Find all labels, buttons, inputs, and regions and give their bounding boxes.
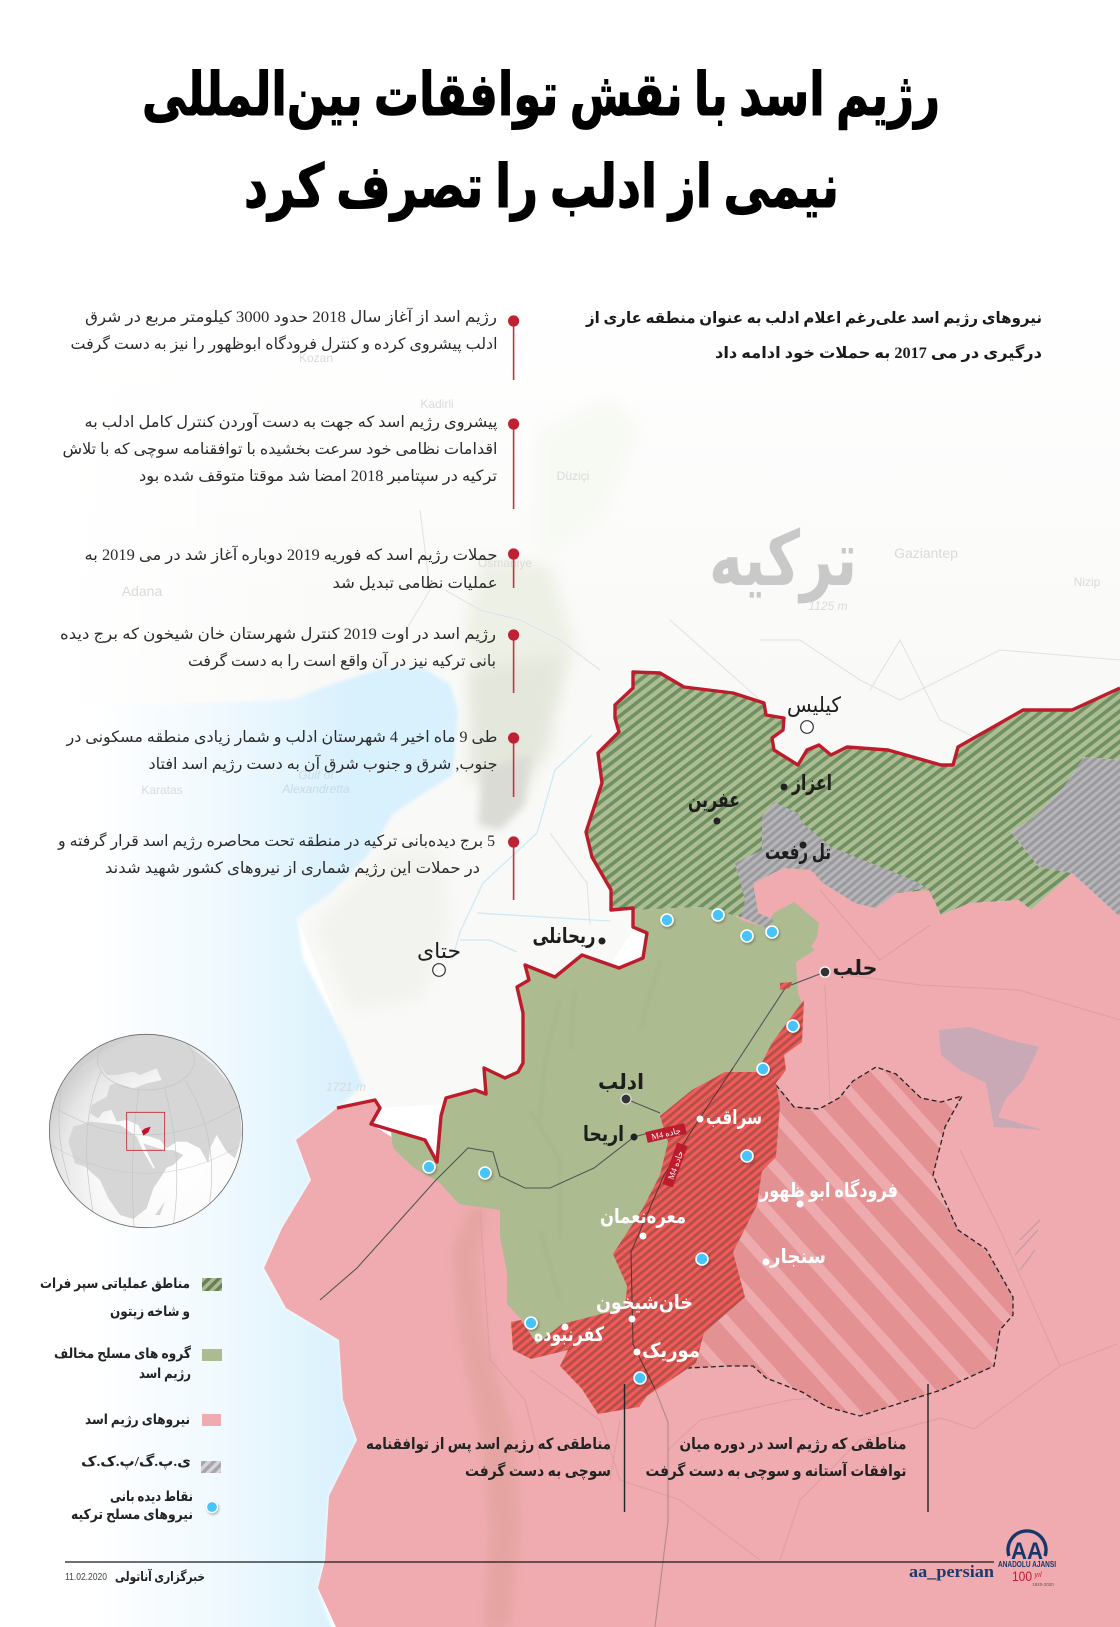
map region: armed opposition groups: [371, 902, 819, 1344]
Turkey border: [337, 672, 1120, 1162]
city labels: حتای: [417, 939, 461, 963]
callout: areas taken between Astana and Sochi: [646, 1384, 928, 1512]
faint base map labels: Gulf of: [298, 768, 335, 782]
faint base map labels: Düziçi: [557, 469, 589, 483]
timeline item 1: [70, 307, 519, 380]
city labels: معره‌نعمان: [600, 1206, 686, 1228]
timeline item 2: ترکیه در سپتامبر 2018 امضا شد موقتا متوقف شده بود: [139, 468, 497, 486]
timeline item 2: پیشروی رژیم اسد که جهت به دست آوردن کنترل کامل ادلب به: [84, 412, 498, 432]
callout: areas taken after Sochi: مناطقی که رژیم اسد پس از توافقنامه: [366, 1436, 611, 1454]
intro text: درگیری در می 2017 به حملات خود ادامه داد: [715, 343, 1042, 362]
road tag: M4 horizontal: [645, 1123, 687, 1143]
city labels: خان‌شیخون: [596, 1292, 693, 1314]
logo: Anadolu Agency: ANADOLU AJANSI: [998, 1559, 1056, 1569]
timeline item 2: اقدامات نظامی خود سرعت بخشیده با توافقنامه سوچی که با تلاش: [62, 441, 497, 458]
logo: Anadolu Agency: AA: [1011, 1538, 1043, 1565]
legend: observation points: نیروهای مسلح ترکیه: [71, 1508, 193, 1523]
timeline item 2: [62, 412, 519, 509]
faint base map labels: Osmaniye: [478, 556, 532, 570]
timeline item 6: 5 برج دیده‌بانی ترکیه در منطقه تحت محاصره رژیم اسد قرار گرفته و: [57, 832, 495, 851]
faint base map labels: Alexandretta: [281, 782, 350, 796]
footer handle: aa_persian: [909, 1562, 995, 1581]
city labels: کیلیس: [787, 693, 841, 717]
callout: areas taken after Sochi: [366, 1384, 624, 1512]
timeline item 1: رژیم اسد از آغاز سال 2018 حدود 3000 کیلومتر مربع در شرق: [85, 307, 497, 327]
map region: YPG/PKK zones: [735, 757, 1120, 928]
faint base map labels: 1721 m: [326, 1080, 366, 1094]
timeline item 4: [60, 626, 519, 693]
legend: Euphrates Shield and Olive Branch: مناطق عملیاتی سپر فرات: [40, 1277, 190, 1292]
city markers: [433, 721, 830, 1356]
timeline item 3: عملیات نظامی تبدیل شد: [332, 575, 498, 592]
locator globe: [49, 1030, 243, 1228]
city labels: موریک: [642, 1340, 700, 1362]
faint base map labels: Karatas: [141, 783, 183, 797]
logo: Anadolu Agency: 1920-2020: [1032, 1582, 1054, 1587]
faint base map labels: Adana: [122, 583, 162, 599]
legend: Euphrates Shield and Olive Branch: و شاخه زیتون: [110, 1305, 190, 1320]
logo: Anadolu Agency: [998, 1531, 1056, 1587]
footer source: خبرگزاری آناتولی: [115, 1568, 205, 1584]
faint base map labels: Nizip: [1074, 575, 1101, 589]
map region: Euphrates Shield and Olive Branch zones: [586, 672, 1120, 917]
city labels: تل رفعت: [765, 840, 831, 864]
city labels: سراقب: [706, 1107, 762, 1129]
land terrain base: [0, 290, 1120, 1110]
city labels: عفرین: [688, 788, 740, 812]
city labels: سنجار: [769, 1246, 826, 1268]
legend: opposition groups: گروه های مسلح مخالف: [54, 1345, 192, 1362]
roads over regions: [320, 972, 825, 1389]
title: [142, 62, 940, 222]
legend: Euphrates Shield and Olive Branch: [40, 1277, 222, 1320]
city labels: حلب: [832, 956, 878, 980]
timeline item 5: [65, 729, 519, 797]
legend: observation points: نقاط دیده بانی: [110, 1490, 193, 1505]
sea: [0, 668, 458, 1627]
city labels: ریحانلی: [532, 924, 596, 948]
legend: opposition groups: رژیم اسد: [139, 1367, 191, 1382]
terrain shading: [315, 400, 1120, 1010]
dashed boundary of striped area: [688, 1067, 1013, 1416]
timeline item 1: ادلب پیشروی کرده و کنترل فرودگاه ابوظهور را نیز به دست گرفت: [70, 335, 497, 354]
faint base map labels: Kozan: [299, 351, 333, 365]
city labels: اریحا: [583, 1122, 624, 1146]
timeline item 3: حملات رژیم اسد که فوریه 2019 دوباره آغاز شد در می 2019 به: [85, 545, 498, 565]
logo: Anadolu Agency: 100: [1012, 1568, 1032, 1584]
Turkish observation points: [423, 909, 799, 1384]
intro text: [585, 310, 1042, 362]
faint base map labels: Kadirli: [420, 397, 454, 411]
footer date: 11.02.2020: [65, 1571, 107, 1583]
city labels: ادلب: [598, 1070, 644, 1094]
map label: Turkey: ترکیه: [709, 518, 857, 604]
road tag: M4 horizontal: جاده M4: [650, 1125, 682, 1142]
timeline item 4: رژیم اسد در اوت 2019 کنترل شهرستان خان شیخون که برج دیده: [60, 626, 496, 644]
legend: YPG/PKK: ی.پ.گ/پ.ک.ک: [81, 1453, 191, 1470]
city labels: کفرنبوده: [534, 1324, 604, 1346]
road tag: M4 vertical: [662, 1142, 688, 1188]
timeline item 5: جنوب, شرق و جنوب شرق آن به دست رژیم اسد افتاد: [148, 754, 498, 774]
legend: opposition groups: [54, 1345, 222, 1382]
faint base map labels: [122, 351, 1101, 1094]
city labels: اعزاز: [791, 771, 832, 795]
callout: areas taken between Astana and Sochi: مناطقی که رژیم اسد در دوره میان: [680, 1436, 906, 1453]
faint base map labels: 1125 m: [808, 599, 848, 613]
timeline item 6: [57, 832, 519, 900]
map region: regime forces: [264, 868, 1120, 1627]
legend: observation points: [71, 1490, 218, 1523]
timeline item 3: [85, 545, 519, 592]
title: نیمی از ادلب را تصرف کرد: [244, 154, 839, 222]
green area relief: [530, 960, 660, 1300]
road tag: M4 vertical: جاده M4: [666, 1149, 685, 1181]
callout: areas taken between Astana and Sochi: توافقات آستانه و سوچی به دست گرفت: [646, 1461, 906, 1481]
logo: Anadolu Agency: yıl: [1034, 1572, 1042, 1579]
intro text: نیروهای رژیم اسد علی‌رغم اعلام ادلب به عنوان منطقه عاری از: [585, 310, 1042, 327]
city labels: فرودگاه ابو ظهور: [759, 1178, 898, 1202]
timeline item 5: طی 9 ماه اخیر 4 شهرستان ادلب و شمار زیادی منطقه مسکونی در: [65, 729, 498, 747]
legend: regime forces: نیروهای رژیم اسد: [85, 1413, 190, 1428]
timeline item 4: بانی ترکیه نیز در آن واقع است را به دست گرفت: [188, 651, 496, 671]
city labels: [417, 693, 898, 1362]
callout: areas taken after Sochi: سوچی به دست گرفت: [465, 1461, 611, 1481]
timeline item 6: در حملات این رژیم شماری از نیروهای کشور شهید شدند: [105, 860, 480, 878]
map region: areas taken after the Sochi agreement: [511, 982, 804, 1414]
legend: YPG/PKK: [81, 1453, 221, 1473]
faint base map labels: Gaziantep: [894, 545, 958, 561]
map region: areas taken between Astana and Sochi agreements: [688, 1067, 1013, 1416]
